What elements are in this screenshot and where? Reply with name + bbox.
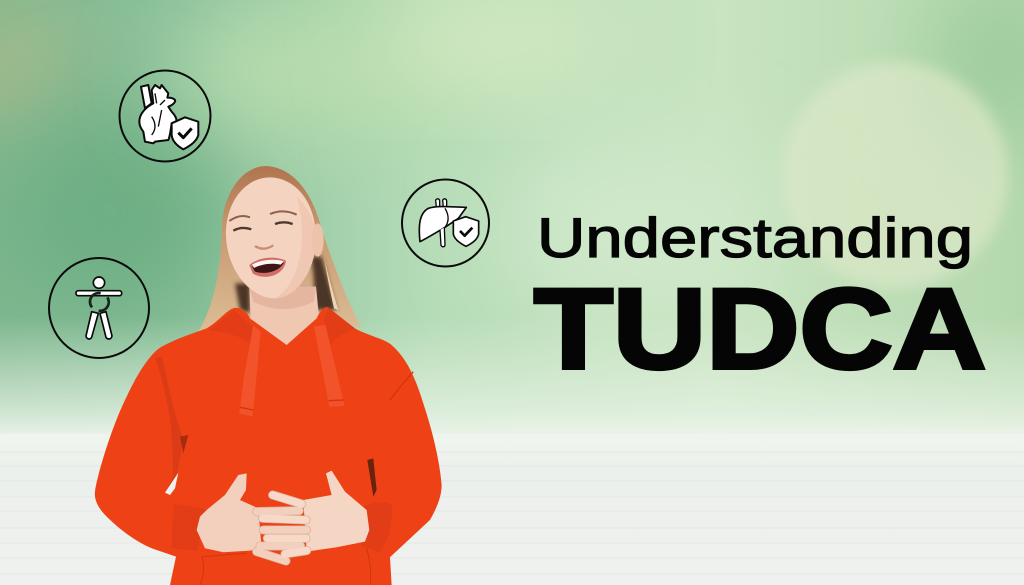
- face: [226, 177, 324, 298]
- heading: TUDCA: TUDCA: [534, 266, 986, 393]
- hands: [197, 471, 369, 561]
- icon: heart with shield: [120, 70, 210, 162]
- neck: [249, 287, 319, 346]
- background: pale wooden floor: [0, 434, 1024, 585]
- hair: [198, 166, 362, 332]
- shield: [172, 117, 198, 149]
- sleeve shading: [155, 357, 183, 493]
- hood folds: [208, 310, 253, 344]
- person: laughing woman in orange hoodie: [95, 166, 442, 585]
- heading: Understanding: Understanding: [537, 206, 973, 269]
- icon: liver with shield: [402, 180, 489, 266]
- background: green bokeh: [0, 0, 1024, 440]
- heart: [141, 85, 152, 108]
- icon: body with circular arrows: [49, 258, 149, 358]
- drawstrings: [239, 325, 345, 417]
- hoodie: [95, 307, 442, 585]
